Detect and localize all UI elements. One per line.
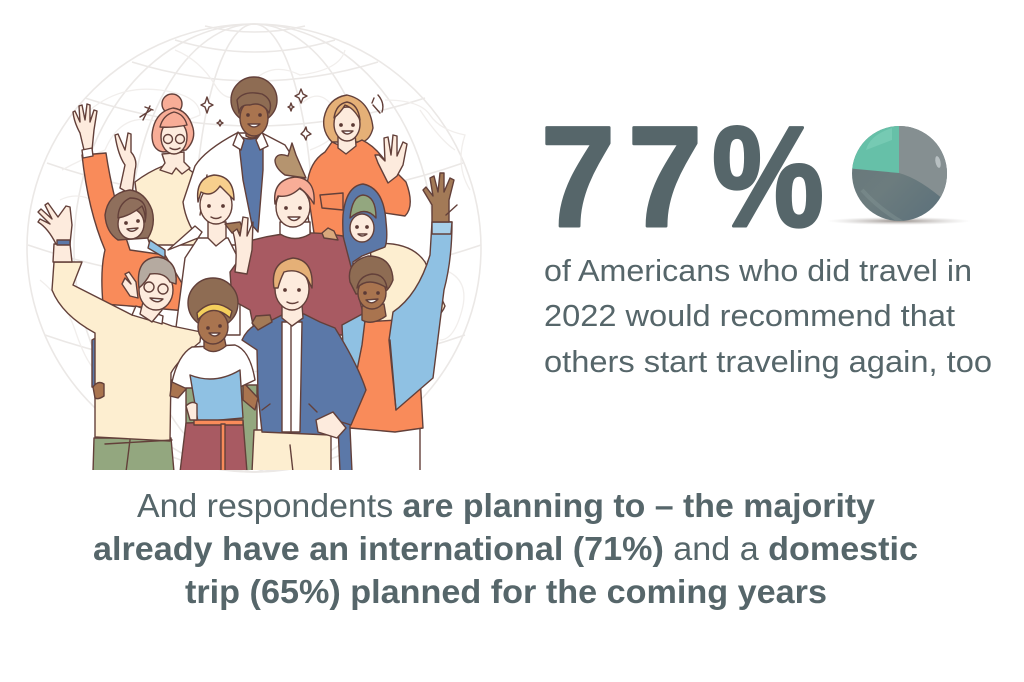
person: blond man [168,175,244,335]
person: woman in hijab [343,184,445,322]
people illustration [38,77,457,472]
statistic description: of Americans who did travel in [544,253,972,288]
bottom summary text: trip (65%) planned for the coming years [185,574,827,611]
bottom summary text: already have an international (71%) and a domestic [93,531,918,568]
globe background [27,24,481,472]
person: older man with glasses [38,203,201,472]
headline number: % [712,98,824,257]
statistic description: 2022 would recommend that [544,298,955,333]
person: man with pink hair in maroon sweater [230,177,363,335]
person: woman in orange hoodie [307,95,410,245]
person: man in light blue jacket [336,173,457,472]
person: man in blue jacket [242,258,366,472]
headline number [541,98,824,257]
icon: 3D pie sphere [836,126,962,224]
globe continents [40,50,470,370]
person: woman with headband [170,278,258,472]
person: waving woman in orange top [73,104,186,311]
person: woman with hair bun [135,94,198,245]
headline number: 7 [628,98,702,257]
statistic description [544,253,992,379]
statistic description: others start traveling again, too [544,344,992,379]
headline number: 7 [541,98,615,257]
person: tall man with afro [183,77,312,245]
bottom summary text [93,488,918,611]
bottom summary text: And respondents are planning to – the majority [137,488,875,525]
icon: sparkles [201,89,311,140]
